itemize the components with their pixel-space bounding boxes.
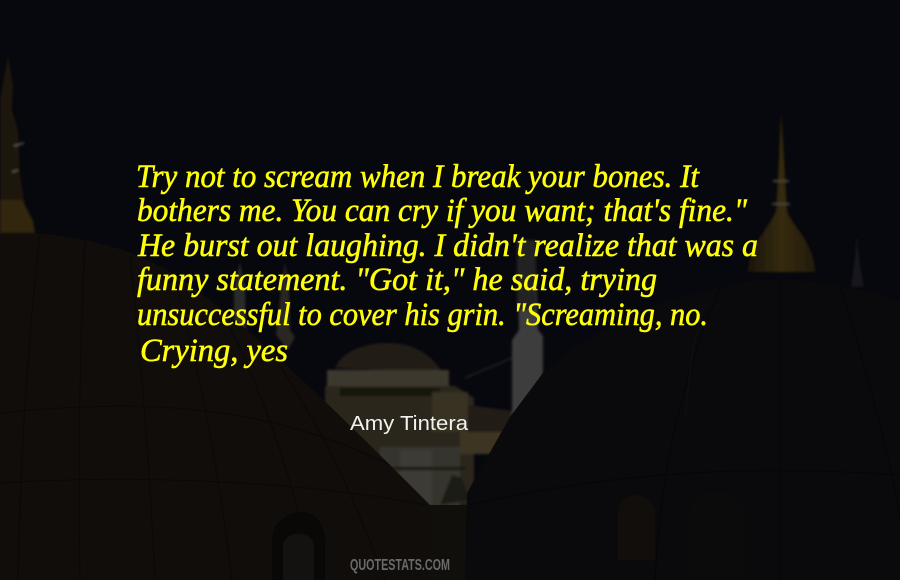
quote text: Try not to scream when I break your bones. It — [136, 159, 700, 195]
quote text: He burst out laughing. I didn't realize that was a — [137, 228, 758, 264]
right dome windows — [618, 491, 745, 575]
quote text: unsuccessful to cover his grin. "Screaming, no. — [137, 297, 708, 333]
thin ridge line — [465, 358, 512, 378]
left golden finial — [0, 55, 35, 233]
left minarets — [234, 262, 295, 350]
quote text: Crying, yes — [140, 333, 288, 369]
quote text — [136, 159, 758, 369]
dome window — [272, 512, 325, 580]
quote text: funny statement. "Got it," he said, trying — [137, 262, 657, 298]
quote text: bothers me. You can cry if you want; that's fine." — [137, 193, 747, 229]
author name: Amy Tintera — [350, 413, 469, 435]
lower centre shadow — [430, 505, 470, 580]
right minaret — [512, 240, 543, 422]
right golden finial — [748, 112, 815, 272]
small right spire — [851, 235, 864, 287]
left dome — [0, 232, 442, 580]
site watermark: QUOTESTATS.COM — [350, 557, 450, 574]
small dark tree — [440, 475, 470, 505]
right dome — [465, 278, 900, 580]
central mosque — [234, 240, 543, 510]
